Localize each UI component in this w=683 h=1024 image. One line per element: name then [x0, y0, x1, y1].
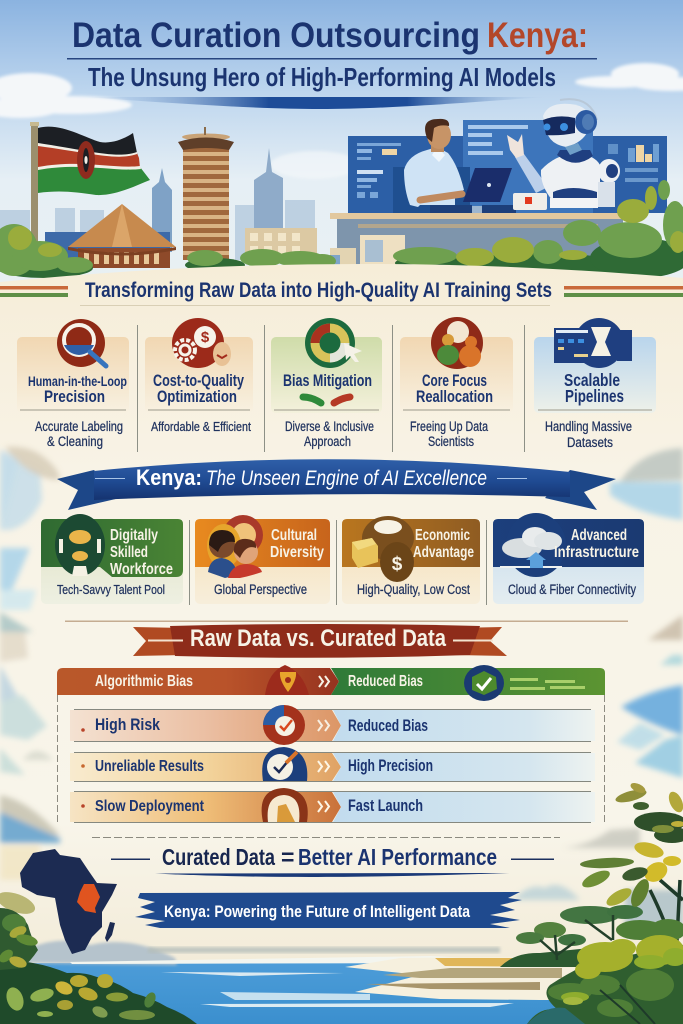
row: slow deployment [70, 788, 595, 822]
scene: lake and shore [0, 941, 683, 1024]
card: digitally skilled workforce: Tech-Savvy Talent Pool [57, 582, 165, 597]
title: Kenya: [487, 16, 588, 55]
card: human-in-the-loop precision: Precision [44, 388, 105, 406]
row: slow deployment: Fast Launch [348, 797, 423, 815]
card: cultural diversity: Diversity [270, 544, 324, 561]
laptop [430, 168, 516, 213]
upper leaves [580, 781, 683, 910]
card: digitally skilled workforce: Workforce [110, 561, 173, 578]
card: core focus reallocation: Core Focus [422, 372, 487, 390]
robot [507, 99, 620, 210]
row: high risk [70, 705, 595, 745]
card: economic advantage: Advantage [413, 544, 474, 561]
man [404, 119, 464, 207]
column dividers [137, 325, 525, 452]
card: human-in-the-loop precision [17, 319, 129, 449]
card: advanced infrastructure: Cloud & Fiber Connectivity [508, 582, 636, 597]
row: unreliable results: Unreliable Results [95, 758, 204, 775]
card: core focus reallocation: Scientists [428, 434, 474, 449]
panel: key benefits [17, 317, 656, 450]
brush banner: powering the future: Kenya: Powering the Future of Intelligent Data [164, 902, 470, 921]
card: cost-to-quality optimization: Cost-to-Quality [153, 372, 245, 390]
card: scalable pipelines: Scalable [564, 370, 620, 390]
trunk [650, 880, 683, 960]
card: digitally skilled workforce: Digitally [110, 527, 158, 544]
grey-blue haze behind tree [625, 890, 683, 935]
card: digitally skilled workforce [41, 514, 183, 604]
card: core focus reallocation: Reallocation [416, 388, 493, 406]
subtitle: The Unsung Hero of High-Performing AI Models [88, 62, 556, 92]
title rule [67, 58, 597, 60]
card: economic advantage: Economic [415, 527, 470, 544]
screen wall [348, 120, 667, 213]
foliage: skyline bushes [0, 180, 683, 278]
card: human-in-the-loop precision: Human-in-the-Loop [28, 373, 127, 389]
card: economic advantage: High-Quality, Low Cost [357, 582, 470, 597]
headline: curated data equals better performance [111, 844, 554, 877]
card: cost-to-quality optimization [145, 318, 253, 434]
subtitle swoosh [85, 97, 545, 109]
section heading: transforming raw data: Transforming Raw Data into High-Quality AI Training Sets [85, 279, 552, 302]
card: digitally skilled workforce: Skilled [110, 544, 148, 561]
icon: KICC tower [178, 127, 234, 260]
card: advanced infrastructure: Infrastructure [554, 544, 639, 561]
foliage: right tree [500, 781, 683, 1024]
counter [330, 213, 623, 269]
card: cultural diversity: Cultural [271, 527, 317, 544]
ribbon heading: raw vs curated: Raw Data vs. Curated Data [190, 625, 447, 652]
clouds [0, 63, 683, 179]
headline: curated data equals better performance: = [281, 844, 294, 870]
table frame [58, 695, 604, 825]
card: core focus reallocation: Freeing Up Data [410, 419, 488, 434]
comparison table [57, 665, 605, 825]
card: bias mitigation [271, 318, 382, 449]
card: cost-to-quality optimization: Optimization [157, 388, 237, 406]
card: bias mitigation: Diverse & Inclusive [285, 419, 374, 434]
card: economic advantage: $ [392, 554, 403, 575]
banner: Kenya the unseen engine: The Unseen Engine of AI Excellence [206, 467, 487, 490]
skyline [0, 148, 317, 262]
banner: Kenya the unseen engine [57, 459, 616, 510]
card: scalable pipelines: Datasets [567, 435, 613, 450]
card: human-in-the-loop precision: Accurate Labeling [35, 419, 123, 434]
foliage: lower left [0, 888, 197, 1024]
side scenery: mountains and water washes [0, 447, 683, 900]
header row [57, 665, 605, 701]
icon: Africa map with Kenya highlighted [20, 849, 117, 954]
lower mass [527, 945, 683, 1024]
card: cultural diversity [195, 515, 330, 604]
card: advanced infrastructure [493, 513, 644, 604]
row: high risk: High Risk [95, 715, 160, 734]
strength dividers [189, 520, 487, 605]
card: cultural diversity: Global Perspective [214, 582, 307, 597]
header row: Reduced Bias [348, 673, 423, 690]
card: cost-to-quality optimization: Affordable & Efficient [151, 419, 251, 434]
row: high risk: Reduced Bias [348, 717, 428, 735]
ribbon heading: raw vs curated [133, 624, 507, 658]
card: bias mitigation: Approach [304, 434, 351, 449]
panel: Kenya strengths [41, 513, 644, 604]
row: unreliable results: High Precision [348, 757, 433, 775]
card: advanced infrastructure: Advanced [571, 527, 627, 544]
illustration: human and robot at data wall [330, 99, 667, 269]
card: scalable pipelines [534, 318, 656, 450]
brush banner: powering the future [135, 892, 522, 928]
dashed rule [92, 836, 560, 838]
row: unreliable results [70, 747, 595, 782]
section rule [65, 620, 628, 622]
banner: Kenya the unseen engine: Kenya: [136, 465, 202, 490]
icon: round conference hall [68, 204, 176, 268]
acacia trees [500, 905, 643, 967]
card: bias mitigation: Bias Mitigation [283, 372, 372, 390]
headline: curated data equals better performance: Curated Data [162, 844, 275, 870]
cream content panel [0, 264, 683, 960]
card: core focus reallocation [400, 317, 513, 449]
title: Data Curation Outsourcing [72, 16, 480, 55]
row: slow deployment: Slow Deployment [95, 798, 205, 815]
header row: Algorithmic Bias [95, 673, 193, 690]
card: human-in-the-loop precision: & Cleaning [47, 434, 103, 449]
icon: Kenya flag [30, 122, 150, 263]
card: economic advantage [342, 516, 480, 604]
sky background [0, 0, 683, 300]
headline: curated data equals better performance: Better AI Performance [298, 844, 497, 870]
card: scalable pipelines: Handling Massive [545, 419, 632, 434]
card: scalable pipelines: Pipelines [565, 386, 624, 406]
card: cost-to-quality optimization: $ [201, 329, 210, 346]
